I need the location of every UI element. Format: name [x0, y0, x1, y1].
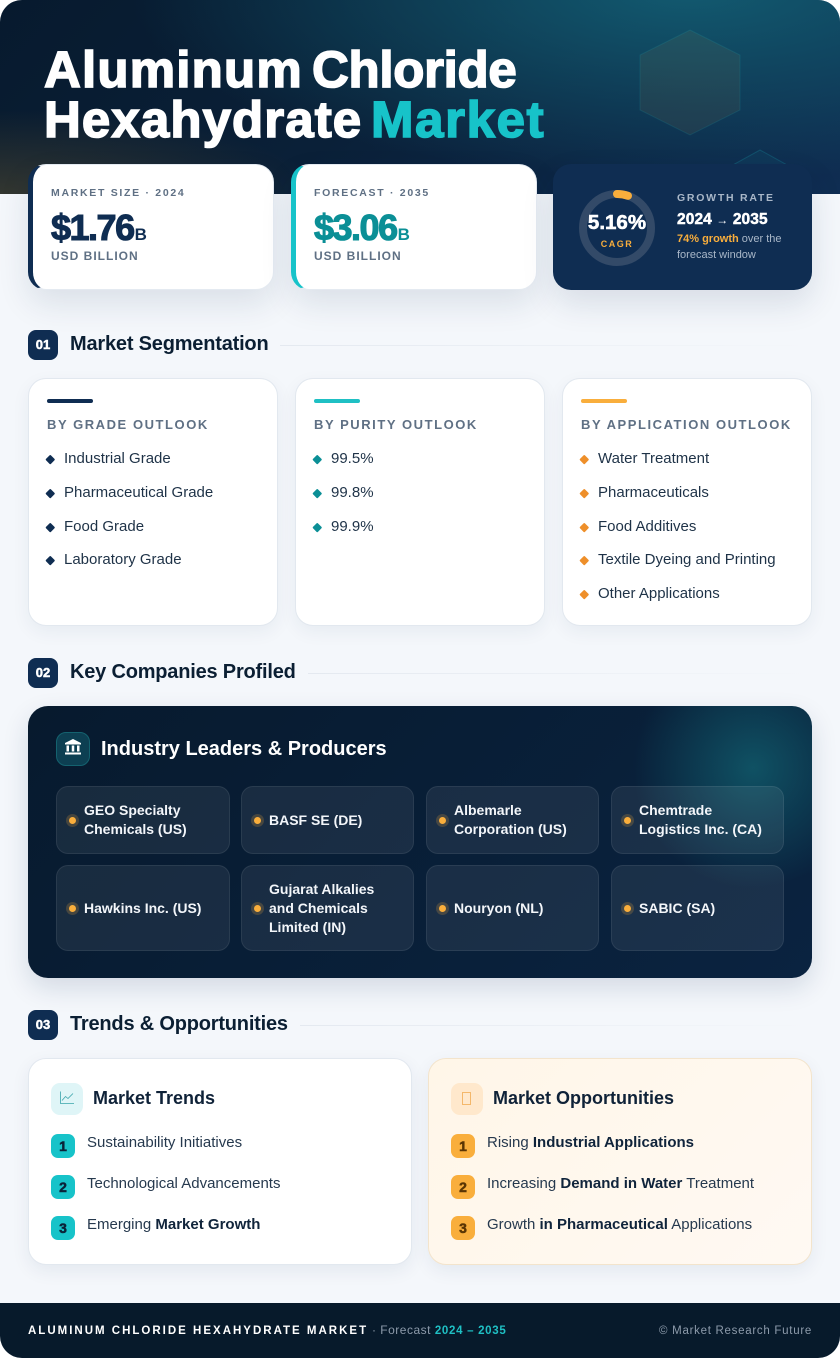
list item: Food Grade — [64, 518, 144, 535]
company chip: Hawkins Inc. (US) — [84, 900, 201, 916]
company chip: Corporation (US) — [454, 821, 567, 837]
title: Market — [371, 91, 545, 148]
company chip — [426, 786, 599, 854]
company chip: BASF SE (DE) — [269, 812, 362, 828]
list item: Food Additives — [598, 518, 696, 535]
opportunity item: Rising Industrial Applications — [487, 1134, 694, 1151]
panel heading: Market Trends — [93, 1088, 215, 1108]
list item: Textile Dyeing and Printing — [598, 551, 776, 568]
CAGR label: CAGR — [601, 239, 633, 249]
growth note: forecast window — [677, 249, 756, 261]
icon: decorative hexagons — [640, 30, 786, 164]
title: Hexahydrate — [44, 91, 362, 148]
stat value: $1.76B — [51, 207, 147, 248]
opportunity item: Growth in Pharmaceutical Applications — [487, 1216, 752, 1233]
number badge — [451, 1134, 475, 1158]
heading: trends and opportunities: Trends & Opportunities — [70, 1013, 288, 1035]
growth note — [677, 233, 782, 261]
heading: market segmentation: Market Segmentation — [70, 333, 268, 355]
company chip: Logistics Inc. (CA) — [639, 821, 762, 837]
company chip — [611, 865, 784, 951]
section number 02 — [28, 658, 58, 688]
section number 03: 03 — [36, 1017, 50, 1032]
panel: by purity outlook — [295, 378, 545, 626]
panel: industry leaders — [28, 706, 812, 978]
company chip: Limited (IN) — [269, 918, 346, 934]
number badge — [451, 1175, 475, 1199]
number badge — [451, 1216, 475, 1240]
icon: line chart — [51, 1083, 83, 1115]
panel heading: BY GRADE OUTLOOK — [47, 417, 209, 432]
panel heading: Industry Leaders & Producers — [101, 738, 387, 760]
footer bar — [0, 1303, 840, 1358]
section number 02: 02 — [36, 665, 50, 680]
number badge: 1 — [459, 1138, 467, 1154]
icon: missing glyph box — [451, 1083, 483, 1115]
stat card: market size 2024 — [28, 164, 274, 290]
panel: market trends — [28, 1058, 412, 1265]
footer title: ALUMINUM CHLORIDE HEXAHYDRATE MARKET · Forecast 2024 – 2035 — [28, 1323, 506, 1337]
growth note: 74% growth over the — [677, 233, 782, 245]
company chip: Chemtrade — [639, 802, 712, 818]
company chip: Gujarat Alkalies — [269, 880, 374, 896]
number badge — [51, 1175, 75, 1199]
stat card: forecast 2035 — [291, 164, 537, 290]
title: Chloride — [312, 41, 516, 98]
company chip: and Chemicals — [269, 900, 368, 916]
company chip: Chemicals (US) — [84, 821, 187, 837]
company chip: Nouryon (NL) — [454, 900, 543, 916]
number badge — [51, 1134, 75, 1158]
list item: Pharmaceutical Grade — [64, 484, 213, 501]
footer credit: © Market Research Future — [659, 1325, 812, 1337]
stat card: growth rate — [553, 164, 812, 290]
list item: Pharmaceuticals — [598, 484, 709, 501]
number badge: 1 — [59, 1138, 67, 1154]
hero left glow — [0, 100, 440, 194]
list item: 99.8% — [331, 484, 374, 501]
section number 03 — [28, 1010, 58, 1040]
title — [44, 41, 545, 148]
list item: 99.9% — [331, 518, 374, 535]
section number 01 — [28, 330, 58, 360]
growth years: 2024 → 2035 — [677, 211, 768, 228]
company chip — [241, 865, 414, 951]
stat label: FORECAST · 2035 — [314, 187, 430, 199]
stat unit: USD BILLION — [51, 249, 139, 263]
list item: Water Treatment — [598, 450, 709, 467]
panel heading: Market Opportunities — [493, 1088, 674, 1108]
heading: key companies profiled: Key Companies Profiled — [70, 661, 296, 683]
company chip: GEO Specialty — [84, 802, 180, 818]
list item: 99.5% — [331, 450, 374, 467]
panel: by application outlook — [562, 378, 812, 626]
growth rate label: GROWTH RATE — [677, 192, 775, 204]
panel: market opportunities — [428, 1058, 812, 1265]
panel heading: BY PURITY OUTLOOK — [314, 417, 478, 432]
list item: Laboratory Grade — [64, 551, 182, 568]
company chip — [241, 786, 414, 854]
list item: Industrial Grade — [64, 450, 171, 467]
list item: Other Applications — [598, 585, 720, 602]
number badge: 3 — [459, 1220, 467, 1236]
hero banner — [0, 0, 840, 194]
company chip: SABIC (SA) — [639, 900, 715, 916]
company chip — [426, 865, 599, 951]
panel heading: BY APPLICATION OUTLOOK — [581, 417, 792, 432]
trend item: Emerging Market Growth — [87, 1216, 260, 1233]
trend item: Sustainability Initiatives — [87, 1134, 242, 1151]
stat unit: USD BILLION — [314, 249, 402, 263]
panel: by grade outlook — [28, 378, 278, 626]
title: Aluminum — [44, 41, 303, 98]
CAGR ring — [579, 190, 655, 266]
section number 01: 01 — [36, 337, 50, 352]
company chip — [56, 865, 230, 951]
number badge: 2 — [459, 1179, 467, 1195]
icon: bank building — [56, 732, 90, 766]
number badge: 2 — [59, 1179, 67, 1195]
company chip — [611, 786, 784, 854]
stat value: $3.06B — [314, 207, 410, 248]
CAGR value: 5.16% — [588, 211, 646, 234]
opportunity item: Increasing Demand in Water Treatment — [487, 1175, 754, 1192]
number badge: 3 — [59, 1220, 67, 1236]
company chip: Albemarle — [454, 802, 522, 818]
trend item: Technological Advancements — [87, 1175, 280, 1192]
stat label: MARKET SIZE · 2024 — [51, 187, 185, 199]
number badge — [51, 1216, 75, 1240]
company chip — [56, 786, 230, 854]
